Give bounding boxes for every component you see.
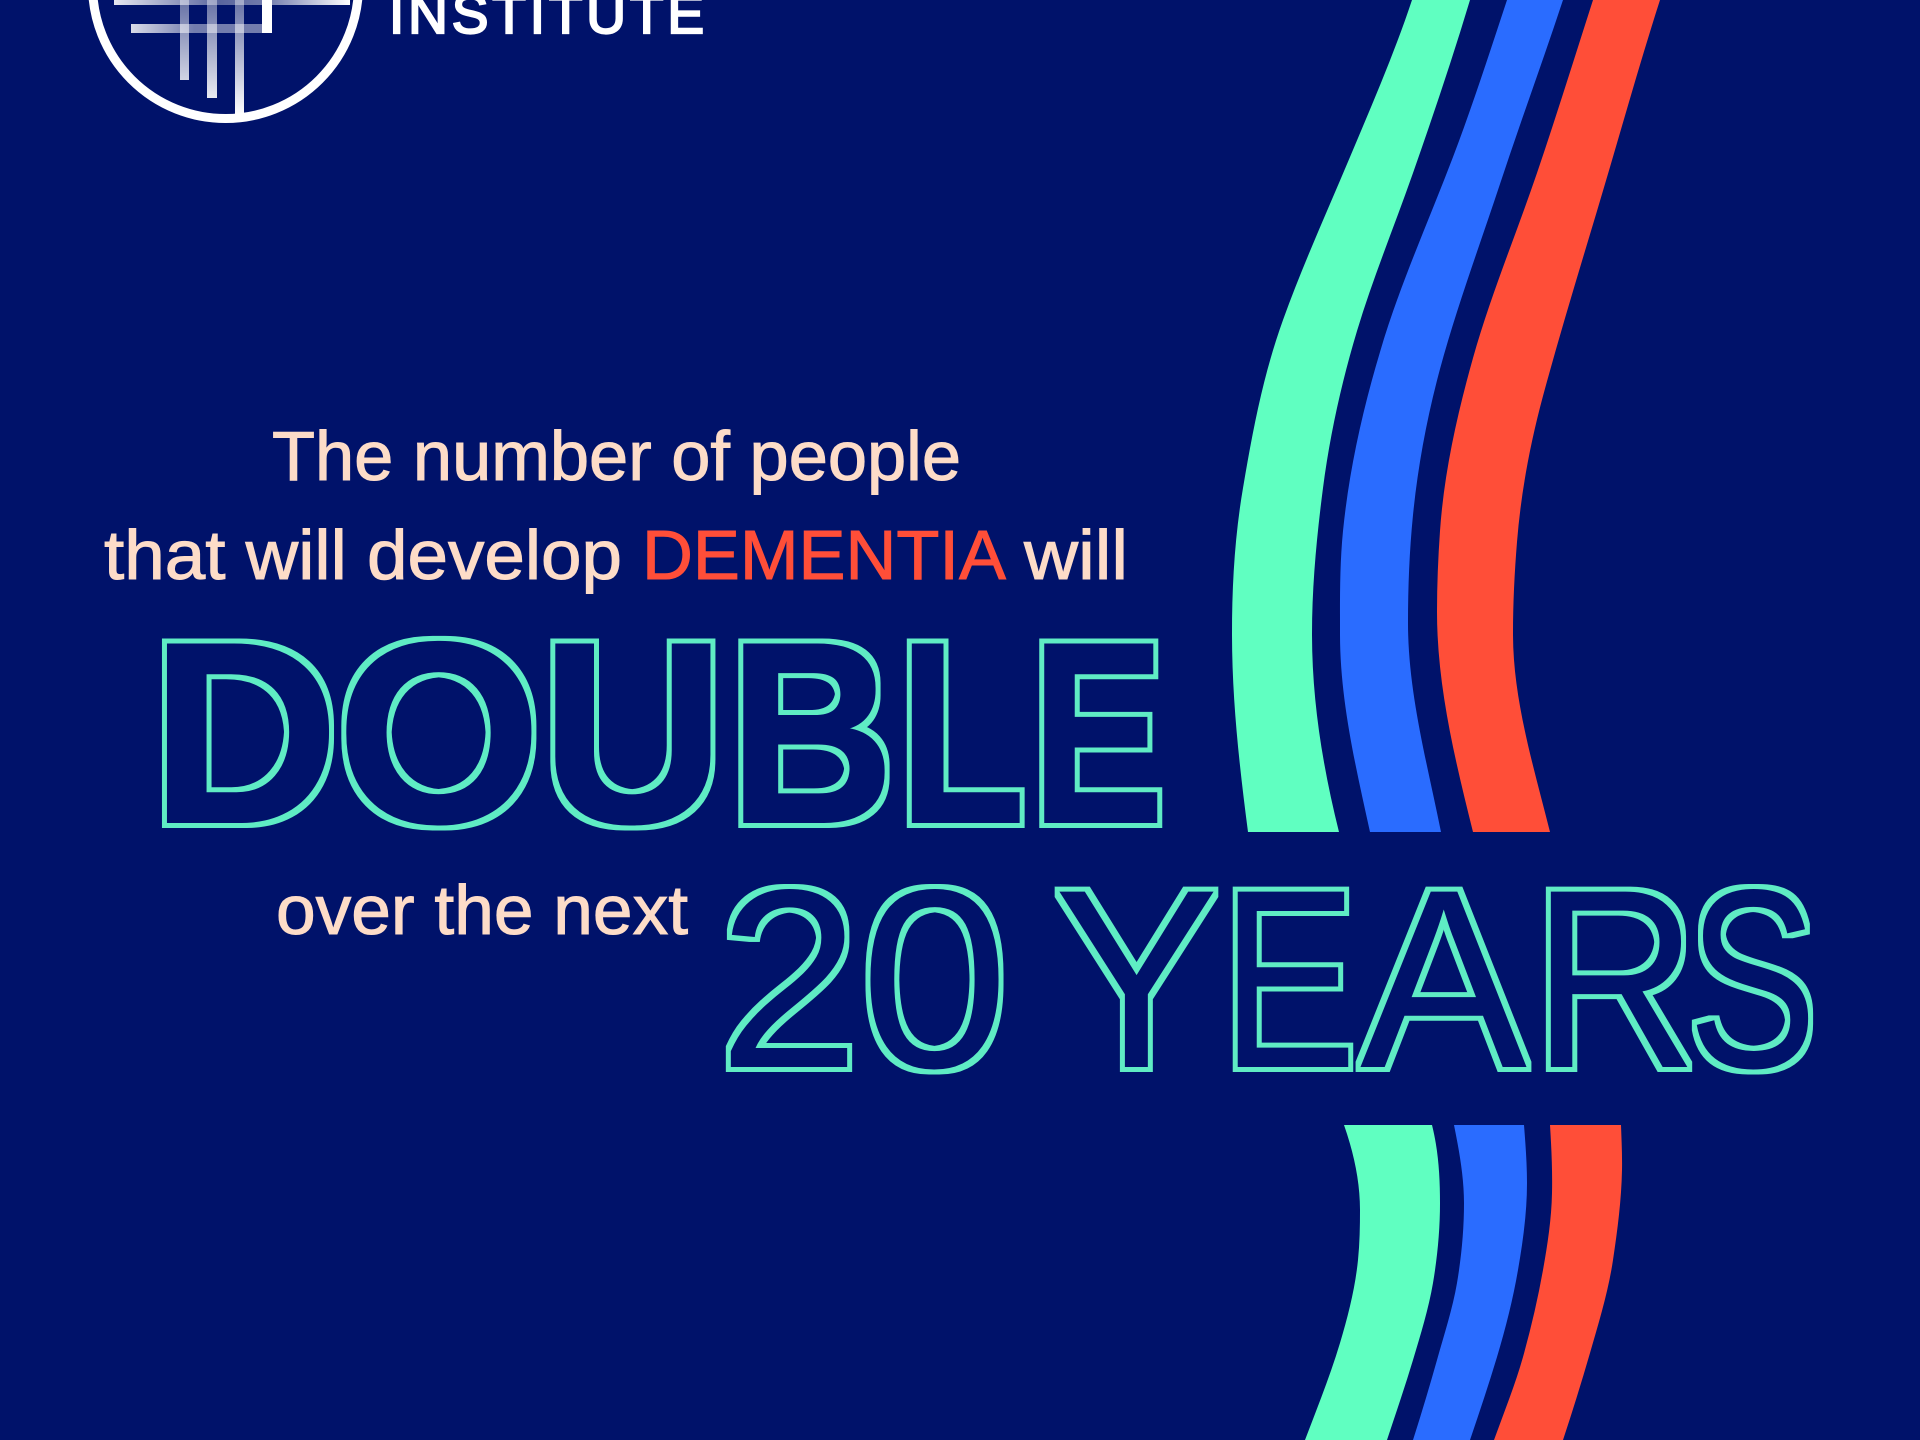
outlined words: 20 years: E xyxy=(1221,837,1357,1122)
green ribbon lower xyxy=(1305,1125,1440,1440)
outlined word: double: O xyxy=(336,588,542,877)
blue ribbon upper xyxy=(1340,0,1563,832)
outlined word: double: D xyxy=(150,588,339,877)
outlined word: double: L xyxy=(899,588,1025,877)
outlined word: double: B xyxy=(729,588,894,877)
headline line 1: The number of people xyxy=(272,417,961,495)
outlined words: 20 years: S xyxy=(1688,837,1817,1122)
outlined words: 20 years: Y xyxy=(1054,837,1219,1122)
outlined words: 20 years: 0 xyxy=(860,837,1009,1122)
ribbons: lower xyxy=(1305,1125,1622,1440)
outlined words: 20 years: A xyxy=(1360,837,1527,1122)
outlined word: double: U xyxy=(541,588,725,877)
highlighted word: dementia: DEMENTIA xyxy=(642,516,1006,594)
logo emblem lattice xyxy=(114,0,350,116)
logo emblem circle xyxy=(92,0,358,118)
headline line 2: will xyxy=(1023,516,1128,594)
outlined words: 20 years: 2 xyxy=(718,837,860,1122)
headline line 2: that will develop xyxy=(104,516,622,594)
outlined word: double: E xyxy=(1032,588,1164,877)
text: over the next: over the next xyxy=(276,871,688,949)
ribbons: upper xyxy=(1232,0,1660,832)
red ribbon lower xyxy=(1494,1125,1622,1440)
logo xyxy=(92,0,704,118)
blue ribbon lower xyxy=(1413,1125,1527,1440)
outlined words: 20 years: R xyxy=(1532,837,1698,1122)
headline line 2 xyxy=(104,516,1128,594)
red ribbon upper xyxy=(1437,0,1660,832)
green ribbon upper xyxy=(1232,0,1470,832)
